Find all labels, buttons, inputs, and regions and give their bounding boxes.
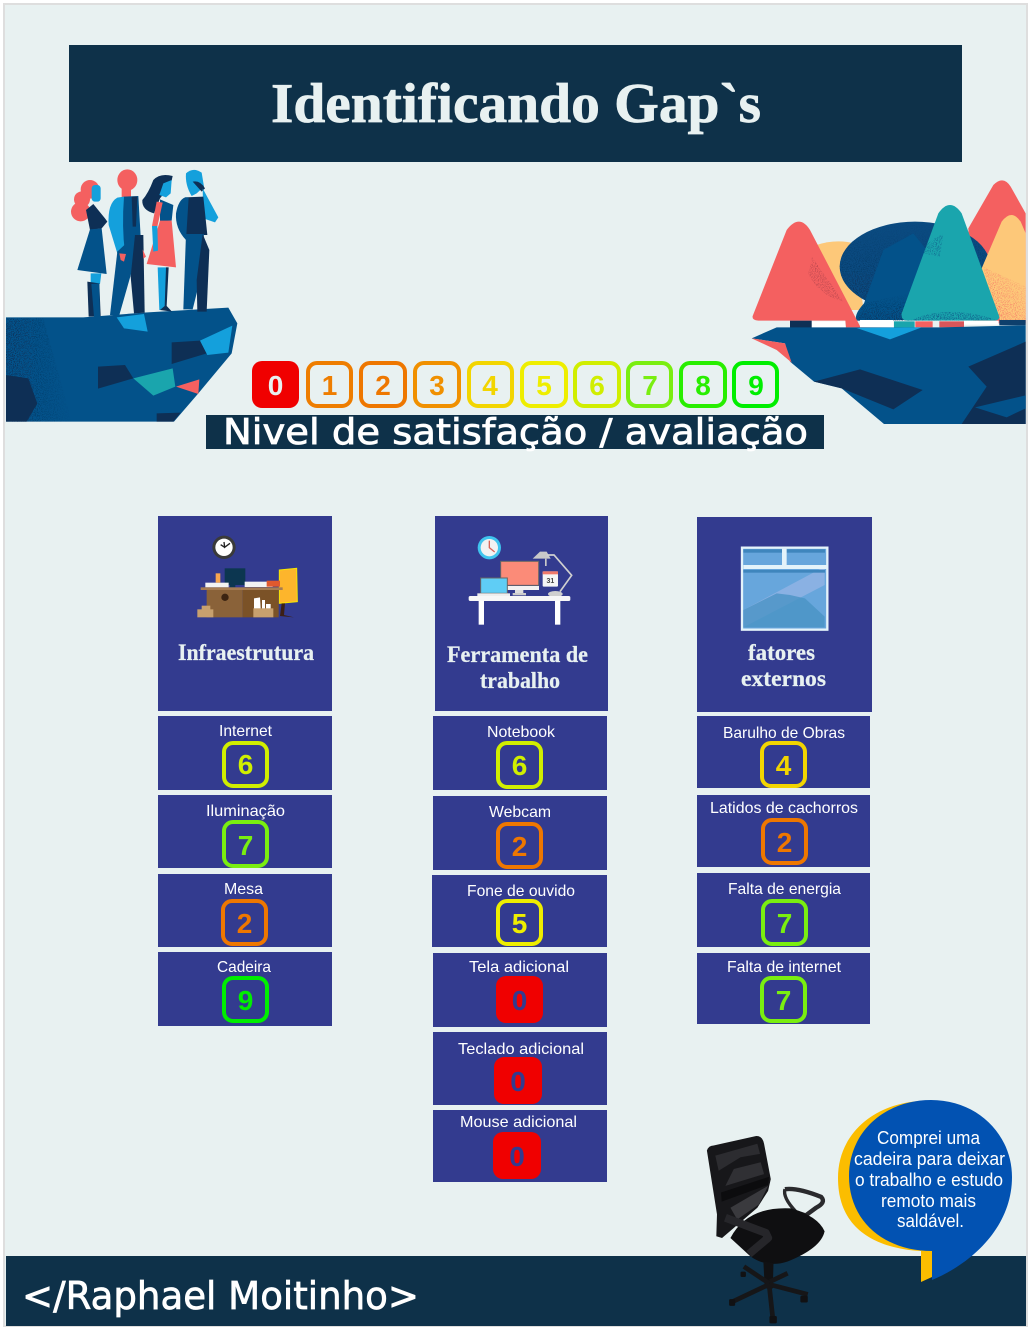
badge 8: 8 — [695, 370, 711, 401]
row: Falta de energia: 7 — [777, 908, 792, 939]
row: Mouse adicional: Mouse adicional — [460, 1114, 577, 1131]
panel: fatores externos — [697, 517, 872, 712]
rating scale legend — [252, 361, 777, 408]
panel: Infraestrutura — [158, 516, 332, 711]
row: Webcam: Webcam — [489, 804, 551, 821]
row: Webcam — [433, 796, 607, 870]
row: Iluminação — [158, 795, 332, 868]
badge 6 — [575, 363, 619, 406]
person 4 — [186, 170, 204, 196]
icon: window — [742, 548, 827, 630]
badge 0 — [252, 361, 299, 408]
heading: Ferramenta de — [447, 642, 588, 667]
badge 9 — [734, 363, 777, 406]
heading: Infraestrutura — [178, 640, 314, 665]
row: Mouse adicional — [433, 1110, 607, 1182]
row: Cadeira — [158, 952, 332, 1026]
badge 2: 2 — [375, 370, 391, 401]
row: Barulho de Obras: 4 — [776, 750, 792, 781]
badge 6: 6 — [589, 370, 605, 401]
row: Mesa: Mesa — [224, 881, 263, 898]
heading: fatores — [748, 640, 815, 665]
row: Internet — [158, 716, 332, 790]
badge 1 — [308, 363, 351, 406]
speech bubble: o trabalho e estudo — [855, 1170, 1003, 1190]
speech bubble: cadeira para deixar — [854, 1149, 1005, 1169]
icon: clean desk: 31 — [546, 578, 554, 585]
speech bubble — [838, 1100, 1012, 1282]
row: Iluminação: Iluminação — [206, 803, 285, 820]
badge 8 — [681, 363, 725, 406]
speech bubble: Comprei uma — [877, 1128, 981, 1148]
badge 0: 0 — [268, 370, 283, 401]
row: Fone de ouvido: 5 — [512, 908, 527, 939]
panel: fatores externos: externos — [741, 666, 826, 691]
row: Mesa — [158, 874, 332, 947]
row: Notebook — [433, 716, 607, 790]
badge 9: 9 — [748, 370, 764, 401]
row: Internet: 6 — [238, 749, 253, 780]
row: Tela adicional — [433, 953, 607, 1027]
row: Fone de ouvido — [432, 875, 607, 947]
row: Falta de energia: Falta de energia — [728, 881, 841, 898]
row: Barulho de Obras — [697, 716, 870, 788]
row: Tela adicional: Tela adicional — [469, 959, 569, 976]
title banner: Identificando Gap`s — [271, 73, 761, 135]
icon: messy desk — [197, 536, 297, 617]
badge 2 — [361, 363, 405, 406]
row: Teclado adicional — [433, 1032, 607, 1105]
row: Teclado adicional: 0 — [510, 1066, 526, 1097]
badge 1: 1 — [322, 370, 337, 401]
badge 3: 3 — [429, 370, 445, 401]
badge 3 — [415, 363, 459, 406]
icon: clean desk — [469, 536, 572, 625]
row: Mesa: 2 — [237, 908, 252, 939]
badge 4 — [469, 363, 512, 406]
panel: Ferramenta de trabalho — [435, 516, 608, 711]
footer bar: </Raphael Moitinho> — [22, 1274, 419, 1318]
row: Falta de energia — [697, 873, 870, 947]
row: Iluminação: 7 — [238, 830, 253, 861]
row: Latidos de cachorros: Latidos de cachorros — [710, 800, 858, 817]
row: Latidos de cachorros — [697, 795, 870, 867]
row: Cadeira: 9 — [238, 985, 253, 1016]
row: Teclado adicional: Teclado adicional — [458, 1041, 584, 1058]
person 3 — [142, 175, 173, 213]
person 2 — [117, 169, 137, 191]
badge 5 — [522, 363, 566, 406]
row: Tela adicional: 0 — [512, 985, 527, 1016]
row: Webcam: 2 — [512, 831, 527, 862]
row: Falta de internet: 7 — [776, 985, 791, 1016]
row: Barulho de Obras: Barulho de Obras — [723, 725, 845, 742]
speech bubble: remoto mais — [881, 1191, 976, 1211]
badge 4: 4 — [482, 370, 498, 401]
row: Mouse adicional: 0 — [509, 1141, 525, 1172]
icon: office chair — [707, 1136, 825, 1323]
row: Latidos de cachorros: 2 — [777, 827, 792, 858]
illustration: people on cliff — [6, 169, 237, 422]
title banner — [69, 45, 962, 162]
row: Notebook: Notebook — [487, 724, 556, 741]
row: Fone de ouvido: Fone de ouvido — [467, 883, 575, 900]
badge 5: 5 — [536, 370, 552, 401]
panel: Ferramenta de trabalho: trabalho — [480, 668, 560, 693]
speech bubble: saldável. — [897, 1211, 964, 1231]
footer bar — [6, 1256, 1026, 1326]
row: Cadeira: Cadeira — [217, 959, 271, 976]
badge 7 — [628, 363, 671, 406]
illustration: trees on floating island — [752, 180, 1026, 424]
row: Internet: Internet — [219, 723, 273, 740]
person 1 — [81, 180, 99, 199]
legend heading: Nivel de satisfação / avaliação — [223, 412, 808, 453]
badge 7: 7 — [642, 370, 658, 401]
row: Notebook: 6 — [512, 750, 527, 781]
row: Falta de internet: Falta de internet — [727, 959, 842, 976]
row: Falta de internet — [697, 953, 870, 1024]
